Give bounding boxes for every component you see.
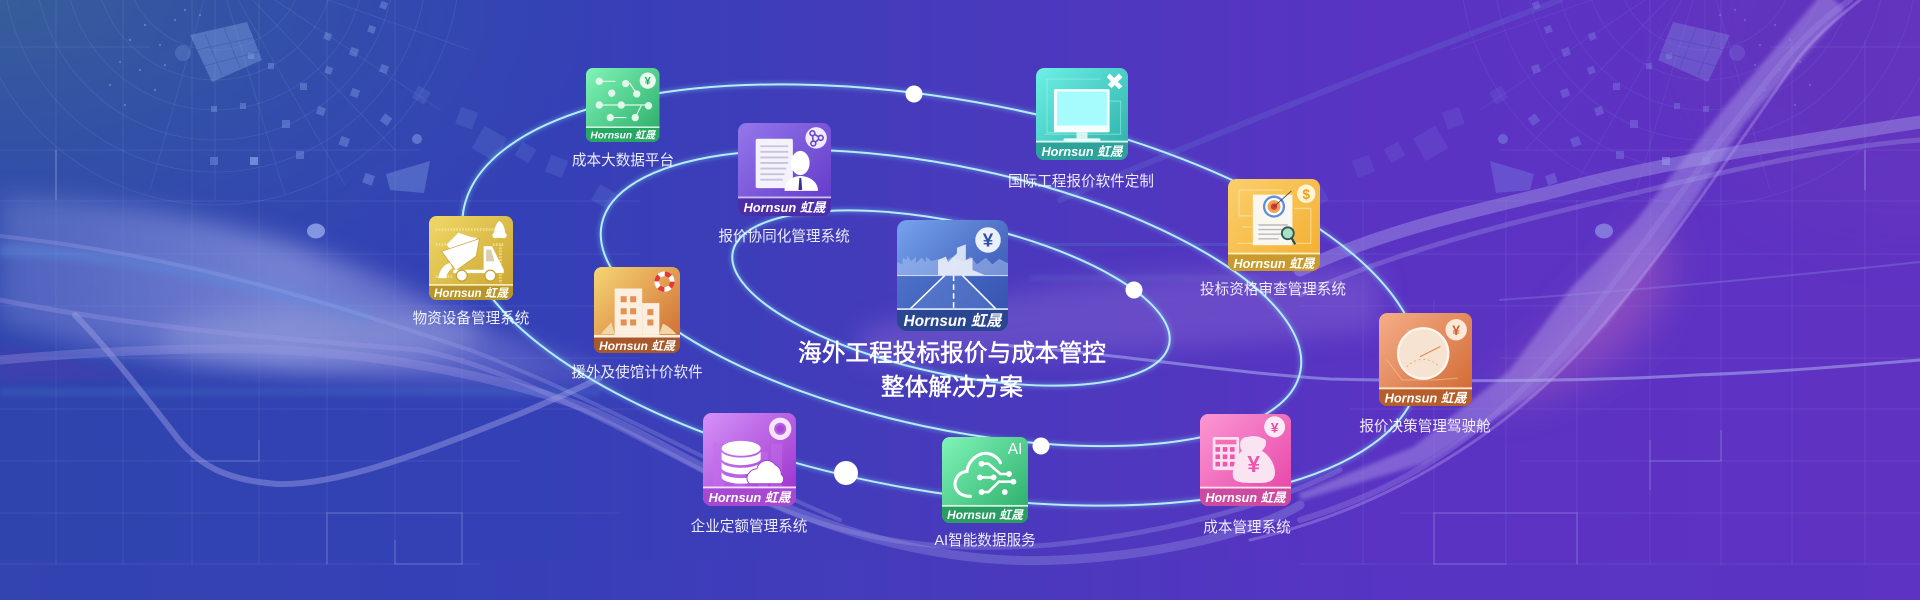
icon: central road: Hornsun 虹晟	[904, 312, 1003, 330]
icon: foreign aid and embassy	[594, 267, 680, 353]
icon: quotation collaboration	[738, 123, 831, 216]
icon: cost management	[1200, 414, 1291, 506]
orbit: middle ellipse	[575, 96, 1327, 500]
icon: enterprise quota database: Hornsun 虹晟	[709, 490, 791, 505]
icon: cost big data platform: ¥	[645, 76, 652, 88]
icon: enterprise quota database	[703, 413, 796, 506]
title: 海外工程投标报价与成本管控	[798, 340, 1106, 367]
icon: central road	[897, 220, 1008, 331]
background: tech mesh right	[1304, 0, 1920, 238]
icon: decision cockpit gauge	[1379, 313, 1472, 406]
label: materials: 物资设备管理系统	[413, 310, 529, 327]
icon: cost management: Hornsun 虹晟	[1205, 490, 1287, 505]
icon: cost management: ¥	[1271, 420, 1279, 435]
orbit: outer ellipse	[429, 18, 1453, 572]
icon: materials and equipment: Hornsun 虹晟	[434, 287, 509, 300]
icon: materials and equipment	[429, 216, 513, 300]
label: cost big data: 成本大数据平台	[572, 152, 674, 169]
icon: bid qualification review: Hornsun 虹晟	[1234, 256, 1316, 271]
background: right pink glow	[1350, 225, 1669, 405]
title	[798, 340, 1106, 401]
icon: foreign aid and embassy: Hornsun 虹晟	[599, 339, 676, 353]
label: AI: AI智能数据服务	[934, 531, 1036, 549]
orbit dot: bottom small	[1032, 438, 1050, 454]
icon: international quotation software customization: Hornsun 虹晟	[1042, 144, 1124, 159]
orbit dot: inner right	[1126, 282, 1142, 298]
label: bid review: 投标资格审查管理系统	[1200, 281, 1346, 298]
icon: AI data service	[942, 437, 1028, 523]
icon: AI data service: AI	[1008, 441, 1022, 458]
label: cost management: 成本管理系统	[1203, 519, 1291, 536]
label: customization: 国际工程报价软件定制	[1008, 173, 1154, 190]
orbit dot: bottom large	[834, 461, 858, 485]
icon: quotation collaboration: Hornsun 虹晟	[744, 200, 826, 215]
icon: international quotation software customization	[1036, 68, 1128, 160]
label: quota: 企业定额管理系统	[691, 517, 807, 535]
label: aid: 援外及使馆计价软件	[571, 364, 703, 381]
icon: cost big data platform	[586, 68, 660, 142]
icon: bid qualification review	[1228, 179, 1320, 271]
labels	[413, 152, 1491, 549]
orbit: inner ellipse	[717, 177, 1185, 419]
icon: decision cockpit gauge: ¥	[1452, 322, 1460, 338]
orbit dot: top	[906, 86, 922, 102]
background: left light band	[0, 195, 640, 396]
label: quotation collaboration: 报价协同化管理系统	[718, 228, 850, 245]
title: 整体解决方案	[881, 374, 1023, 401]
icon: cost management: ¥	[1247, 451, 1260, 477]
label: cockpit: 报价决策管理驾驶舱	[1359, 418, 1491, 435]
background: tech mesh left	[0, 0, 616, 238]
icon: bid qualification review: $	[1302, 187, 1310, 202]
icon: decision cockpit gauge: Hornsun 虹晟	[1385, 391, 1467, 406]
background: central purple band	[860, 243, 1380, 360]
icon: central road: ¥	[983, 230, 994, 251]
icon: cost big data platform: Hornsun 虹晟	[590, 130, 657, 142]
background: bright grid highlights	[56, 150, 1865, 564]
icon: AI data service: Hornsun 虹晟	[947, 508, 1024, 522]
